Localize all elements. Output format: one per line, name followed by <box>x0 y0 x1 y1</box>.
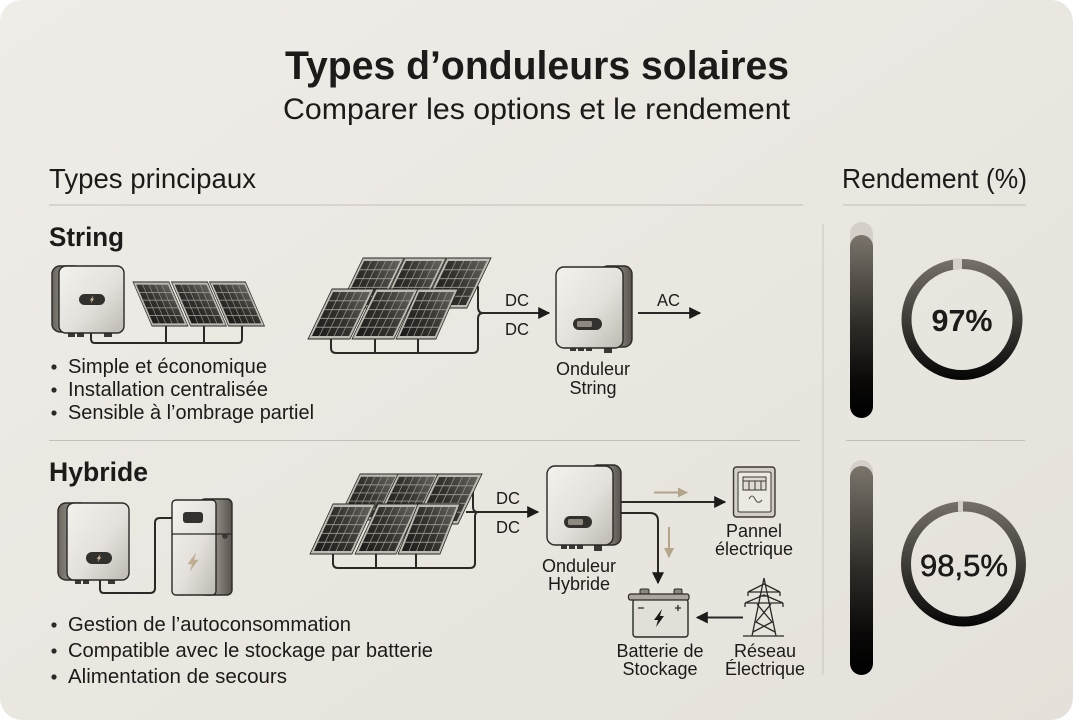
bar: hybrid efficiency <box>850 460 873 675</box>
icon: three solar panels small <box>91 282 264 343</box>
label: pannel electrique: Pannel <box>726 521 782 541</box>
arrow: tan flow to panel <box>654 492 687 494</box>
list: hybrid benefits: Compatible avec le stockage par batterie <box>68 640 433 662</box>
label: onduleur string: Onduleur <box>556 359 630 379</box>
icon: hybrid inverter large <box>547 465 621 551</box>
label: reseau electrique <box>725 641 805 679</box>
icon: pylon <box>743 578 784 636</box>
label: batterie de stockage <box>616 641 704 679</box>
list: hybrid benefits: Gestion de l’autoconsommation <box>68 614 351 636</box>
arrow: dc to string inverter <box>483 312 549 314</box>
label: dc top: DC <box>496 488 520 508</box>
donut: 97% <box>906 258 1018 375</box>
icon: hybrid inverter and battery <box>58 499 232 595</box>
label: dc top: DC <box>505 290 529 310</box>
list: string benefits <box>51 356 314 424</box>
panel: rendement string <box>850 222 1018 418</box>
label: onduleur hybride <box>542 556 616 594</box>
list: hybrid benefits <box>51 614 433 688</box>
label: dc bottom: DC <box>496 517 520 537</box>
list: string benefits: Simple et économique <box>68 356 267 378</box>
panel: rendement hybride <box>850 460 1021 675</box>
arrow: inverter to electrical panel <box>621 501 725 503</box>
donut: 98,5%: 98,5% <box>920 548 1008 583</box>
heading: string: String <box>49 222 124 252</box>
arrow: dc to hybrid inverter <box>466 511 538 513</box>
arrow: ac output <box>638 312 700 314</box>
diagram: hybrid array <box>310 474 482 568</box>
label: pannel electrique: électrique <box>715 539 793 559</box>
icon: string inverter small <box>52 266 124 337</box>
label: dc bottom: DC <box>505 319 529 339</box>
icon: electrical panel <box>734 467 775 517</box>
title: Types d’onduleurs solaires <box>285 44 789 88</box>
panel: string <box>49 222 700 424</box>
label: reseau electrique: Réseau <box>734 641 796 661</box>
list: string benefits: Installation centralisée <box>68 379 268 401</box>
label: ac: AC <box>657 290 680 310</box>
label: onduleur string <box>556 359 630 398</box>
arrow: grid to battery <box>697 616 743 618</box>
donut: 98,5% <box>906 500 1021 622</box>
subtitle: Comparer les options et le rendement <box>283 93 791 126</box>
label: onduleur hybride: Onduleur <box>542 556 616 576</box>
heading: rendement: Rendement (%) <box>842 163 1027 194</box>
panel: hybride <box>49 457 805 688</box>
icon: battery <box>628 589 689 637</box>
arrow: tan flow to battery <box>668 527 670 557</box>
donut: 97%: 97% <box>932 303 992 338</box>
label: onduleur hybride: Hybride <box>548 574 610 594</box>
heading: types principaux: Types principaux <box>49 163 256 194</box>
list: string benefits: Sensible à l’ombrage partiel <box>68 402 314 424</box>
list: hybrid benefits: Alimentation de secours <box>68 666 287 688</box>
label: onduleur string: String <box>569 378 617 398</box>
label: batterie de stockage: Stockage <box>622 659 698 679</box>
diagram: string array <box>308 258 491 353</box>
label: pannel electrique <box>715 521 793 559</box>
heading: hybride: Hybride <box>49 457 148 487</box>
label: reseau electrique: Électrique <box>725 659 805 679</box>
icon: string inverter large <box>556 266 632 353</box>
bar: string efficiency <box>850 222 873 418</box>
label: batterie de stockage: Batterie de <box>616 641 704 661</box>
arrow: inverter to battery <box>620 513 658 583</box>
